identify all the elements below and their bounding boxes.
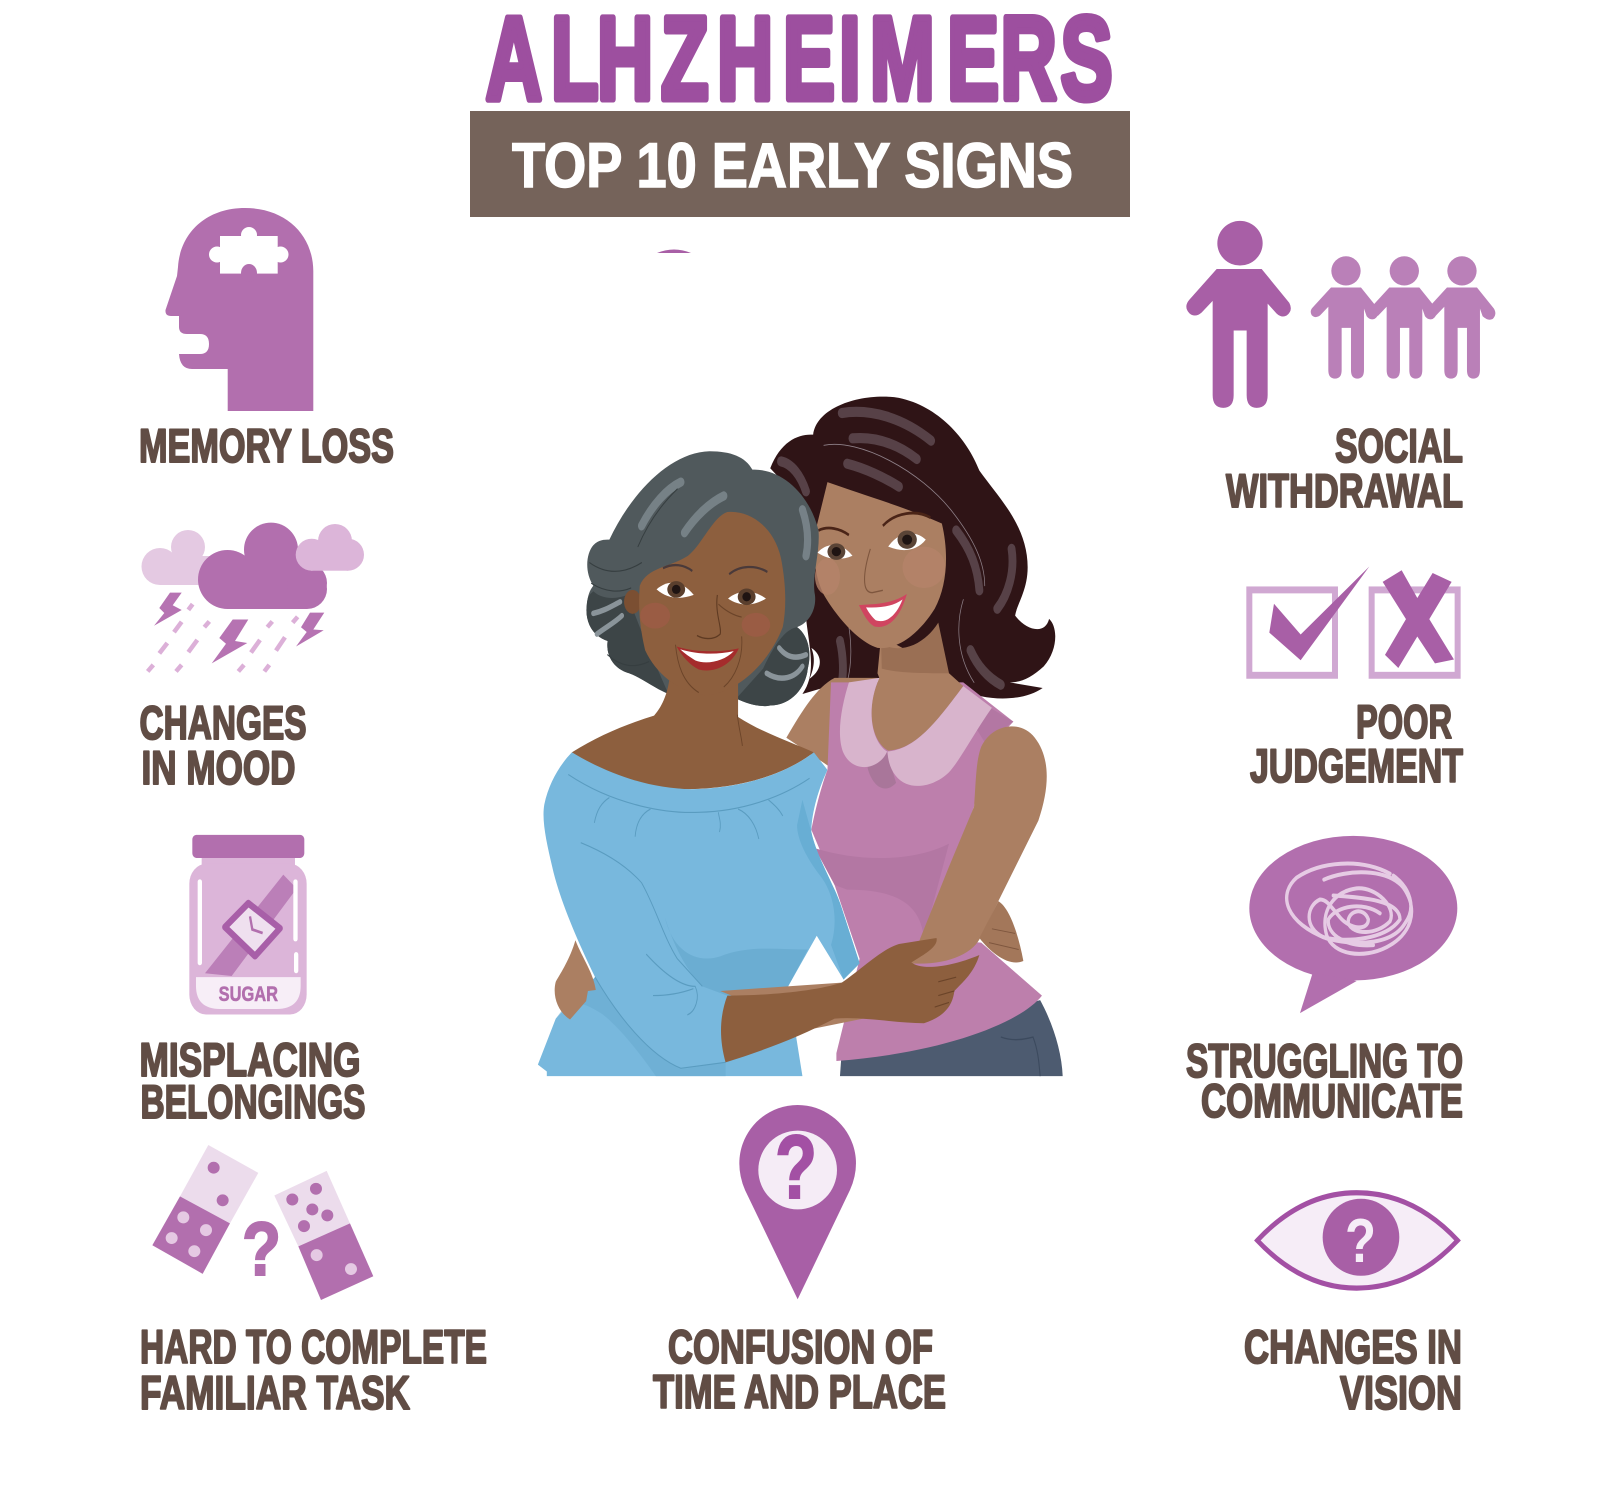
label: poor judgement: JUDGEMENT <box>1250 739 1463 792</box>
younger woman forearm behind elder arm <box>720 983 863 1029</box>
label: misplacing belongings: BELONGINGS <box>140 1075 366 1128</box>
label: confusion of time and place <box>653 1320 946 1418</box>
icon: one person apart from a group <box>1186 221 1495 408</box>
younger woman far arm <box>786 678 878 775</box>
elder woman mouth <box>677 647 739 670</box>
jar label <box>196 977 301 1009</box>
label: misplacing belongings <box>140 1033 366 1128</box>
subtitle banner: TOP 10 EARLY SIGNS <box>512 131 1073 201</box>
label: changes in mood: IN MOOD <box>142 741 296 794</box>
younger woman hair highlights <box>781 412 1012 685</box>
illustration: two women embracing <box>538 397 1063 1076</box>
subtitle banner <box>470 111 1130 217</box>
younger woman neck <box>872 636 963 751</box>
icon: eye with question mark: ? <box>1345 1207 1376 1276</box>
lightning bolts <box>154 593 324 663</box>
label: memory loss: MEMORY LOSS <box>139 419 394 472</box>
label: struggling to communicate: STRUGGLING TO <box>1186 1034 1463 1087</box>
younger woman hand on back, right <box>979 901 1023 963</box>
younger woman face <box>814 482 946 648</box>
main cloud <box>198 523 327 609</box>
label: changes in mood <box>140 696 306 794</box>
elder woman face <box>639 512 785 695</box>
label: misplacing belongings: MISPLACING <box>140 1033 360 1086</box>
label: social withdrawal: WITHDRAWAL <box>1226 464 1463 517</box>
label: struggling to communicate <box>1186 1034 1463 1127</box>
icon: sugar jar with watch <box>189 835 307 1015</box>
label: changes in vision: VISION <box>1340 1366 1462 1419</box>
icon: location pin with question mark: ? <box>775 1118 817 1218</box>
younger woman mouth <box>859 594 907 627</box>
elder woman hair <box>586 451 819 706</box>
icon: head with puzzle piece <box>165 208 313 411</box>
pink top <box>811 682 1042 1061</box>
icon: location pin with question mark <box>739 1105 856 1299</box>
gap between hair and shoulder <box>810 648 820 679</box>
blouse shading <box>665 917 808 996</box>
light left cloud <box>142 530 225 585</box>
icon: sugar jar with watch: SUGAR <box>219 983 278 1006</box>
icon: speech bubble with scribble <box>1249 836 1457 1013</box>
collar <box>867 751 896 789</box>
younger woman eyes <box>817 513 930 593</box>
elder woman ear <box>624 590 641 614</box>
label: changes in vision: CHANGES IN <box>1244 1320 1462 1373</box>
icon: storm clouds <box>142 523 364 671</box>
younger woman blush <box>903 547 945 588</box>
label: hard to complete familiar task <box>140 1320 487 1419</box>
label: changes in mood: CHANGES <box>140 696 306 749</box>
elder woman blush <box>640 603 670 629</box>
label: changes in vision <box>1244 1320 1462 1419</box>
icon: dominoes with question mark: ? <box>242 1207 281 1292</box>
clipped purple fragment <box>657 250 691 253</box>
label: social withdrawal <box>1226 419 1463 517</box>
jeans <box>840 1000 1063 1076</box>
elder woman arm and hand <box>721 938 979 1062</box>
label: poor judgement: POOR <box>1356 695 1452 748</box>
label: struggling to communicate: COMMUNICATE <box>1201 1074 1463 1127</box>
younger woman near arm <box>911 726 1047 964</box>
elder woman eyes <box>657 565 767 693</box>
younger woman hand on blouse, left <box>555 940 596 1020</box>
rain <box>148 604 298 671</box>
label: confusion of time and place: TIME AND PLACE <box>653 1365 946 1418</box>
younger woman hair <box>770 397 1055 698</box>
elder woman blouse <box>538 752 860 1076</box>
icon: eye with question mark <box>1257 1193 1458 1288</box>
label: hard to complete familiar task: HARD TO COMPLETE <box>140 1320 487 1373</box>
icon: check and cross boxes <box>1249 566 1458 675</box>
elder woman neck and chest <box>572 673 814 789</box>
watch strap <box>205 875 297 976</box>
icon: dominoes with question mark <box>152 1145 373 1300</box>
watch face <box>225 903 280 956</box>
elder woman hair shading <box>586 591 809 706</box>
label: social withdrawal: SOCIAL <box>1335 419 1463 472</box>
label: hard to complete familiar task: FAMILIAR TASK <box>140 1366 410 1419</box>
label: poor judgement <box>1250 695 1463 792</box>
light right cloud <box>296 524 364 571</box>
label: confusion of time and place: CONFUSION OF <box>668 1320 933 1373</box>
